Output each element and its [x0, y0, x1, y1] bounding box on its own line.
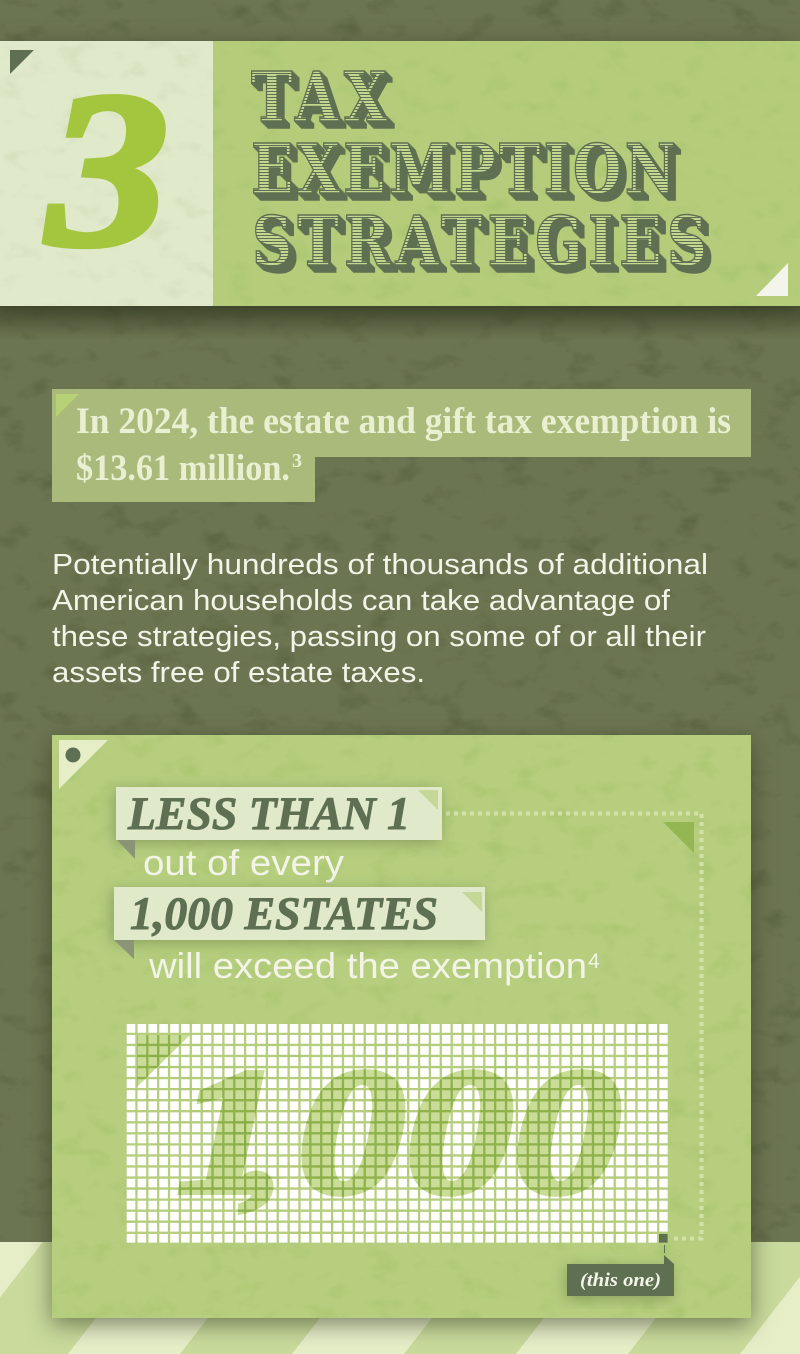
banner	[0, 41, 800, 306]
highlighted square	[659, 1234, 668, 1243]
panel: estates statistic	[52, 735, 751, 1318]
numeral 1,000 over grid	[137, 1033, 622, 1232]
numeral 1,000 over grid: 0	[298, 1033, 406, 1232]
ribbon: 1,000 estates	[114, 887, 485, 959]
text: will exceed the exemption: will exceed the exemption	[148, 945, 587, 986]
banner: title panel	[0, 41, 800, 306]
icon: callout corner triangle	[56, 394, 79, 417]
callout amount: $13.61 million.	[76, 448, 290, 489]
panel background	[52, 735, 751, 1318]
chart: grid of 1,000 squares	[127, 1028, 668, 1243]
body text: assets free of estate taxes.	[52, 657, 425, 689]
callout: exemption amount	[52, 389, 751, 502]
callout text: In 2024, the estate and gift tax exemption is	[76, 401, 731, 442]
title: EXEMPTION	[251, 130, 676, 209]
icon: white corner triangle	[756, 263, 788, 296]
callout footnote mark: 3	[292, 450, 302, 472]
text: out of every: out of every	[143, 842, 344, 883]
body text: these strategies, passing on some of or all their	[52, 621, 706, 653]
numeral 3: 3	[45, 47, 169, 293]
text: footnote mark: 4	[588, 950, 600, 973]
body text: Potentially hundreds of thousands of additional	[52, 549, 708, 581]
banner: number panel	[0, 41, 213, 306]
ribbon: 1,000 estates: 1,000 ESTATES	[130, 888, 438, 940]
dotted outline	[446, 814, 702, 1238]
numeral 1,000 over grid: 0	[514, 1033, 622, 1232]
numeral 1,000 over grid: 0	[406, 1033, 514, 1232]
title: TAX	[251, 58, 388, 137]
numeral 1,000 over grid: 1	[176, 1033, 284, 1232]
tag: this one: (this one)	[580, 1270, 661, 1291]
body text: American households can take advantage of	[52, 585, 671, 617]
icon: green corner triangle	[663, 822, 694, 853]
callout background	[52, 389, 751, 502]
ribbon: less than 1: LESS THAN 1	[127, 788, 410, 840]
title: STRATEGIES	[252, 202, 707, 281]
icon: pinned corner	[59, 740, 108, 789]
title	[251, 58, 707, 281]
icon: dark corner triangle	[10, 50, 34, 74]
tag: this one	[567, 1245, 674, 1296]
ribbon: less than 1	[116, 787, 442, 859]
body text	[52, 549, 708, 689]
background: diagonal stripes at the bottom	[0, 1242, 800, 1354]
numeral 1,000 over grid: ,	[242, 1081, 282, 1219]
